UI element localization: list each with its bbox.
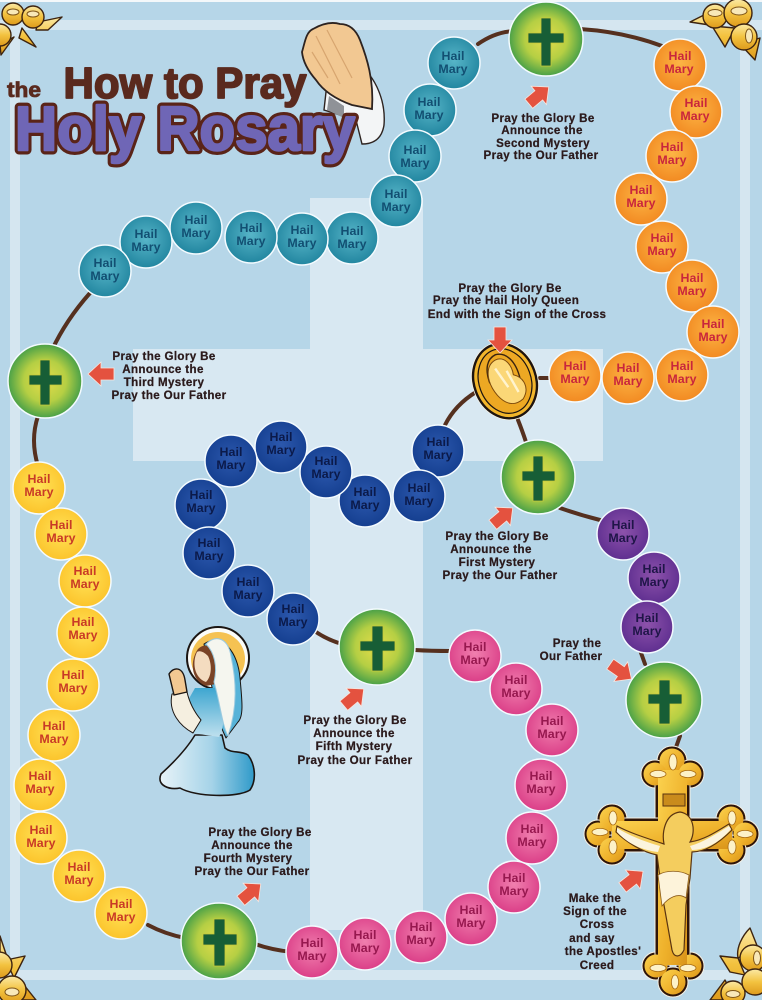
bead — [47, 659, 99, 711]
torso — [178, 688, 224, 737]
figure of Christ — [616, 812, 732, 956]
caption: fourth mystery: Fourth Mystery — [204, 852, 293, 865]
bead: Hail — [680, 271, 704, 285]
bead: Hail — [28, 769, 52, 783]
bead: Hail — [239, 221, 263, 235]
icon: golden crucifix — [584, 746, 759, 997]
arrow to opening Our Father bead — [603, 654, 638, 689]
bead: Mary — [639, 575, 669, 589]
bead: Hail — [290, 223, 314, 237]
caption: third mystery: Announce the — [122, 363, 204, 376]
bead: Hail — [236, 575, 260, 589]
caption: fifth mystery: Announce the — [313, 727, 395, 740]
icon: praying hands — [302, 23, 384, 144]
icon: kneeling Mary — [160, 627, 254, 795]
bead: Mary — [24, 485, 54, 499]
caption: first mystery: Pray the Glory Be — [445, 530, 549, 543]
arrow to fourth mystery bead — [233, 875, 268, 910]
veil outer — [204, 640, 242, 738]
caption: second mystery: Second Mystery — [496, 137, 590, 150]
bead: Hail — [635, 611, 659, 625]
bead: Hail — [197, 536, 221, 550]
caption: first mystery: First Mystery — [459, 556, 536, 569]
caption: first mystery: Announce the — [450, 543, 532, 556]
praying hands — [169, 669, 187, 695]
bead — [255, 421, 307, 473]
bead: Hail — [611, 518, 635, 532]
bead: Mary — [236, 234, 266, 248]
red arrows — [88, 78, 650, 910]
bead — [225, 211, 277, 263]
corner roses top right — [690, 0, 760, 60]
bead: Hail — [403, 143, 427, 157]
bead: Mary — [70, 577, 100, 591]
bead — [35, 508, 87, 560]
bead — [300, 446, 352, 498]
bead: Hail — [93, 256, 117, 270]
bead: Mary — [404, 494, 434, 508]
bead: Hail — [61, 668, 85, 682]
caption: fourth mystery — [195, 826, 312, 878]
decade: pink beads — [286, 630, 578, 978]
bead: Hail — [300, 936, 324, 950]
caption: third mystery: Third Mystery — [124, 376, 204, 389]
caption: sign of the cross: the Apostles' — [565, 945, 641, 958]
caption: second mystery: Announce the — [501, 124, 583, 137]
bead — [393, 470, 445, 522]
arrow to third mystery bead — [88, 362, 114, 386]
Our Father bead: first mystery — [501, 440, 575, 514]
bead — [13, 462, 65, 514]
bead: Mary — [186, 501, 216, 515]
bead: Hail — [642, 562, 666, 576]
bead — [205, 435, 257, 487]
caption: fifth mystery — [298, 714, 413, 767]
arrow to crucifix — [615, 862, 650, 897]
bead: Hail — [219, 445, 243, 459]
bead: Mary — [216, 458, 246, 472]
bead: Mary — [90, 269, 120, 283]
bead: Mary — [25, 782, 55, 796]
bead — [326, 212, 378, 264]
caption: first mystery — [443, 530, 558, 582]
corner roses top left — [0, 3, 62, 55]
bead: Mary — [501, 686, 531, 700]
bead — [449, 630, 501, 682]
bead — [59, 555, 111, 607]
caption: fourth mystery: Pray the Our Father — [195, 865, 310, 878]
bead: Hail — [441, 49, 465, 63]
caption: fifth mystery: Pray the Our Father — [298, 754, 413, 767]
caption: sign of the cross: Cross — [580, 918, 614, 931]
hair and face — [193, 645, 217, 686]
bead — [339, 475, 391, 527]
bead: Hail — [134, 227, 158, 241]
bead: Mary — [400, 156, 430, 170]
bead: Hail — [73, 564, 97, 578]
caption: Hail Holy Queen: End with the Sign of the Cross — [428, 308, 606, 321]
corner roses bottom right — [710, 928, 762, 1000]
bead — [515, 759, 567, 811]
bead: Mary — [667, 372, 697, 386]
bead: Mary — [26, 836, 56, 850]
bead: Mary — [664, 62, 694, 76]
bead: Hail — [184, 213, 208, 227]
Our Father bead: fourth mystery — [181, 903, 257, 979]
bead: Hail — [629, 183, 653, 197]
large pale cross — [133, 198, 603, 930]
bead — [445, 893, 497, 945]
bead — [53, 850, 105, 902]
bead: Hail — [189, 488, 213, 502]
bead — [404, 84, 456, 136]
bead: Mary — [499, 884, 529, 898]
bead: Hail — [27, 472, 51, 486]
bead — [602, 352, 654, 404]
caption: third mystery — [112, 350, 227, 402]
bead — [370, 175, 422, 227]
bead: Mary — [46, 531, 76, 545]
bead: Mary — [406, 933, 436, 947]
caption: sign of the cross: Creed — [580, 959, 614, 972]
bead: Mary — [58, 681, 88, 695]
bead: Mary — [106, 910, 136, 924]
decade: yellow beads — [13, 462, 147, 939]
bead: Hail — [459, 903, 483, 917]
bead — [14, 759, 66, 811]
bead: Mary — [560, 372, 590, 386]
cross gold fill — [586, 748, 756, 994]
bead: Mary — [613, 374, 643, 388]
caption: sign of the cross: Make the — [569, 892, 621, 905]
bead: Mary — [266, 443, 296, 457]
bead — [654, 39, 706, 91]
bead — [628, 552, 680, 604]
bead: Mary — [423, 448, 453, 462]
Our Father bead: fifth mystery — [339, 609, 415, 685]
bead — [395, 911, 447, 963]
bead: Mary — [647, 244, 677, 258]
bead — [170, 202, 222, 254]
bead: Hail — [660, 140, 684, 154]
corner roses bottom left — [0, 936, 36, 1000]
Our Father bead: second mystery — [509, 2, 583, 76]
cross outline — [584, 746, 759, 997]
bead — [549, 350, 601, 402]
caption: Hail Holy Queen: Pray the Hail Holy Queen — [433, 294, 579, 307]
caption: third mystery: Pray the Glory Be — [112, 350, 216, 363]
bead: Mary — [233, 588, 263, 602]
bead — [428, 37, 480, 89]
bead: Mary — [460, 653, 490, 667]
bead: Hail — [417, 95, 441, 109]
arrow to fifth mystery bead — [336, 680, 371, 715]
bead — [286, 926, 338, 978]
bead — [621, 601, 673, 653]
bead: Mary — [526, 782, 556, 796]
bead: Mary — [680, 109, 710, 123]
bead: Hail — [269, 430, 293, 444]
bead: Mary — [350, 941, 380, 955]
caption: sign of the cross: and say — [569, 932, 615, 945]
bead — [389, 130, 441, 182]
bead: Mary — [608, 531, 638, 545]
bead: Hail — [502, 871, 526, 885]
bead: Mary — [297, 949, 327, 963]
bead: Mary — [438, 62, 468, 76]
caption: sign of the cross: Sign of the — [563, 905, 627, 918]
arrow to medal — [488, 327, 512, 353]
bead: Hail — [49, 518, 73, 532]
bead — [488, 861, 540, 913]
caption: opening Our Father: Our Father — [540, 650, 603, 663]
Our Father bead: third mystery — [8, 344, 82, 418]
bead: Hail — [407, 481, 431, 495]
bead: Hail — [314, 454, 338, 468]
caption: opening Our Father: Pray the — [553, 637, 601, 650]
bead: Hail — [42, 719, 66, 733]
bead: Mary — [626, 196, 656, 210]
bead — [597, 508, 649, 560]
bead: Hail — [463, 640, 487, 654]
bead: Mary — [517, 835, 547, 849]
bead — [687, 306, 739, 358]
bead: Hail — [353, 485, 377, 499]
bead — [28, 709, 80, 761]
bead — [183, 527, 235, 579]
bead: Mary — [537, 727, 567, 741]
bead — [666, 260, 718, 312]
caption: first mystery: Pray the Our Father — [443, 569, 558, 582]
bead: Hail — [67, 860, 91, 874]
bead: Hail — [684, 96, 708, 110]
veil inner — [206, 639, 235, 736]
caption: opening Our Father — [540, 637, 603, 663]
plaque — [663, 794, 685, 806]
caption: sign of the cross — [563, 892, 641, 972]
bead: Hail — [340, 224, 364, 238]
bead: Mary — [632, 624, 662, 638]
bead: Mary — [414, 108, 444, 122]
bead — [656, 349, 708, 401]
bead — [276, 213, 328, 265]
bead: Hail — [281, 602, 305, 616]
bead: Mary — [131, 240, 161, 254]
Our Father bead: opening — [626, 662, 702, 738]
caption: Hail Holy Queen: Pray the Glory Be — [458, 282, 562, 295]
caption: second mystery: Pray the Our Father — [484, 149, 599, 162]
bead: Hail — [563, 359, 587, 373]
bead — [636, 221, 688, 273]
bead: Mary — [64, 873, 94, 887]
bead: Mary — [677, 284, 707, 298]
robe skirt — [160, 735, 254, 795]
bead — [526, 704, 578, 756]
title line: How to Pray: How to Pray — [64, 59, 307, 108]
bead: Mary — [657, 153, 687, 167]
bead — [175, 479, 227, 531]
bead: Hail — [109, 897, 133, 911]
title word: the: the — [7, 79, 41, 102]
bead: Hail — [670, 359, 694, 373]
bead — [490, 663, 542, 715]
bead: Mary — [68, 628, 98, 642]
bead: Mary — [337, 237, 367, 251]
decade: teal beads — [79, 37, 480, 297]
bead: Mary — [698, 330, 728, 344]
bead: Mary — [287, 236, 317, 250]
bead — [646, 130, 698, 182]
bead — [222, 565, 274, 617]
bead: Hail — [520, 822, 544, 836]
bead — [615, 173, 667, 225]
bead — [670, 86, 722, 138]
petal highlights — [592, 754, 753, 989]
bead — [506, 812, 558, 864]
caption: fourth mystery: Announce the — [211, 839, 293, 852]
bead: Hail — [426, 435, 450, 449]
bead — [120, 216, 172, 268]
bead: Hail — [616, 361, 640, 375]
bead: Hail — [540, 714, 564, 728]
title line: Holy Rosary: Holy Rosary — [15, 95, 355, 164]
caption: Hail Holy Queen — [428, 282, 606, 321]
bead — [95, 887, 147, 939]
caption: second mystery — [484, 112, 599, 162]
caption: fifth mystery: Fifth Mystery — [316, 740, 393, 753]
bead: Hail — [409, 920, 433, 934]
caption: second mystery: Pray the Glory Be — [491, 112, 595, 125]
bead: Mary — [181, 226, 211, 240]
decade: navy beads — [175, 421, 464, 645]
bead: Hail — [384, 187, 408, 201]
decade: orange beads — [549, 39, 739, 404]
arrow to second mystery caption — [521, 78, 556, 113]
bead: Mary — [350, 498, 380, 512]
bead: Hail — [504, 673, 528, 687]
rosary string — [34, 29, 680, 952]
bead — [267, 593, 319, 645]
bead: Hail — [701, 317, 725, 331]
sleeve — [171, 692, 201, 733]
bead: Hail — [71, 615, 95, 629]
bead: Hail — [353, 928, 377, 942]
bead: Hail — [529, 769, 553, 783]
bead — [15, 812, 67, 864]
bead: Mary — [311, 467, 341, 481]
caption: third mystery: Pray the Our Father — [112, 389, 227, 402]
title — [7, 59, 307, 108]
bead — [79, 245, 131, 297]
icon: Mary medal — [460, 332, 550, 430]
bead — [57, 607, 109, 659]
bead: Hail — [650, 231, 674, 245]
bead: Mary — [381, 200, 411, 214]
introductory purple beads — [597, 508, 680, 653]
bead: Mary — [39, 732, 69, 746]
bead: Mary — [278, 615, 308, 629]
bead: Mary — [194, 549, 224, 563]
caption: fifth mystery: Pray the Glory Be — [303, 714, 407, 727]
bead: Hail — [668, 49, 692, 63]
bead — [412, 425, 464, 477]
arrow to first mystery bead — [485, 499, 520, 534]
bead — [339, 918, 391, 970]
bead: Mary — [456, 916, 486, 930]
bead: Hail — [29, 823, 53, 837]
caption: fourth mystery: Pray the Glory Be — [208, 826, 312, 839]
title line: Holy Rosary: Holy Rosary — [15, 95, 355, 164]
